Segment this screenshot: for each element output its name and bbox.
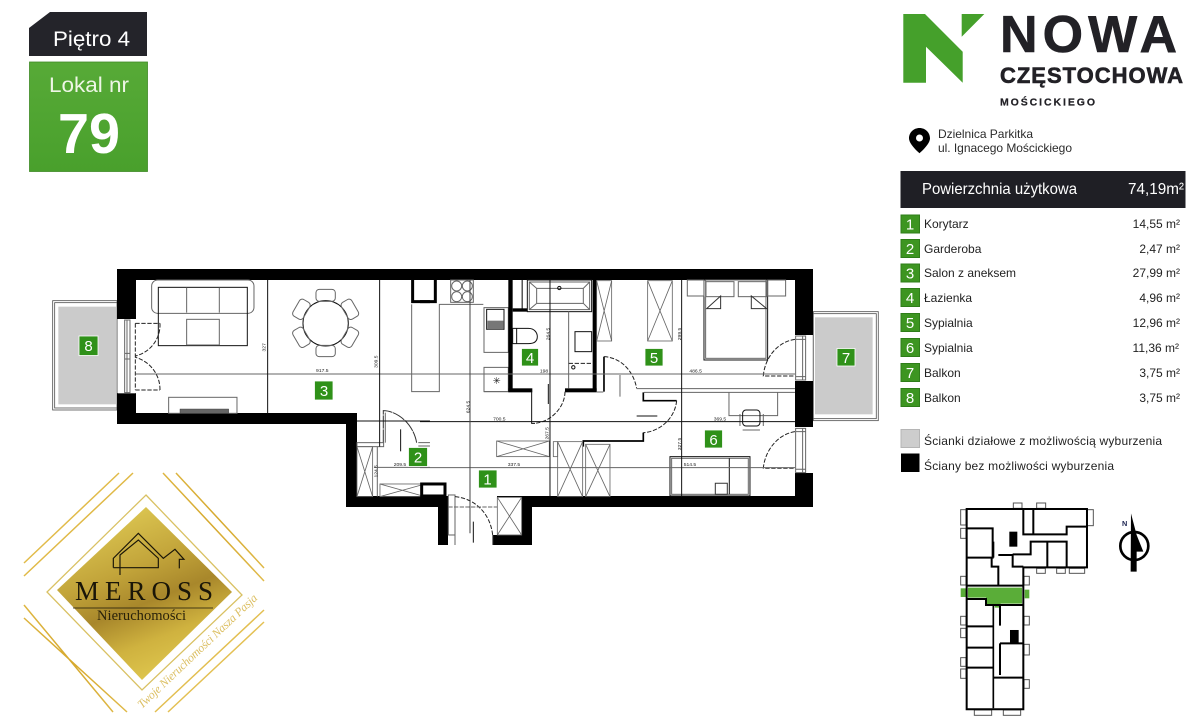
developer logo: Nowa Częstochowa bbox=[903, 6, 1183, 108]
room 4 row bbox=[901, 288, 1180, 307]
room 2 row: Garderoba bbox=[924, 242, 982, 256]
room 5 row: 5 bbox=[906, 315, 914, 332]
marker 5 bbox=[645, 348, 663, 367]
dimension lines: 327 bbox=[262, 343, 268, 351]
marker 2 bbox=[408, 448, 428, 466]
room 1 row: 1 bbox=[906, 216, 914, 234]
dimension lines: 267.5 bbox=[545, 427, 551, 440]
kitchen fittings: ✳ bbox=[493, 376, 501, 386]
Meross Nieruchomości logo: Twoje Nieruchomości Nasza Pasja bbox=[134, 591, 260, 711]
room 1 row: 14,55 m² bbox=[1133, 217, 1180, 231]
marker 4: 4 bbox=[526, 350, 534, 367]
marker 6: 6 bbox=[709, 432, 718, 449]
room 5 row: Sypialnia bbox=[924, 316, 973, 330]
unit number badge bbox=[30, 62, 148, 172]
room 5 row bbox=[901, 314, 1180, 332]
dimension lines: 264.5 bbox=[546, 328, 552, 340]
marker 3 bbox=[314, 381, 333, 400]
Meross Nieruchomości logo: MEROSS bbox=[75, 576, 213, 606]
marker 7: 7 bbox=[842, 350, 850, 367]
marker 7 bbox=[837, 348, 855, 367]
room 1 row bbox=[901, 215, 1180, 234]
room 8 row: Balkon bbox=[924, 391, 961, 405]
dimension lines: 369.5 bbox=[714, 416, 726, 422]
balconies on key plan bbox=[961, 503, 1093, 715]
marker 1: 1 bbox=[483, 472, 492, 488]
balcony 7 bbox=[813, 312, 878, 421]
room 2 row: 2 bbox=[906, 241, 914, 258]
dimension lines bbox=[136, 280, 795, 533]
Meross Nieruchomości logo: Nieruchomości bbox=[97, 608, 186, 624]
corridor partitions and doors bbox=[583, 357, 795, 447]
marker 8: 8 bbox=[84, 338, 93, 355]
marker 6 bbox=[704, 430, 722, 449]
developer logo: Nowa Częstochowa: NOWA bbox=[1000, 6, 1177, 64]
building outline on key plan bbox=[967, 509, 1087, 709]
dimension lines: 327.5 bbox=[677, 438, 683, 450]
room 2 row bbox=[901, 240, 1180, 258]
floor tag: Piętro 4: Piętro 4 bbox=[53, 28, 130, 51]
bedroom 6 desk, chair and bed bbox=[670, 392, 778, 496]
marker 4 bbox=[522, 348, 538, 367]
gold stripes bbox=[24, 473, 264, 712]
floor tag: Piętro 4 bbox=[29, 12, 147, 56]
usable area header bar: Powierzchnia użytkowa bbox=[922, 181, 1077, 198]
developer logo: Nowa Częstochowa: MOŚCICKIEGO bbox=[1000, 96, 1095, 108]
bedroom 5 wardrobes and bed bbox=[597, 280, 786, 360]
address with location pin bbox=[909, 127, 1072, 155]
room 6 row bbox=[901, 338, 1179, 357]
dimension lines: 299.5 bbox=[677, 328, 683, 340]
room 2 row: 2,47 m² bbox=[1139, 242, 1180, 256]
sofa and coffee table bbox=[152, 280, 254, 346]
room 5 row: 12,96 m² bbox=[1133, 316, 1180, 330]
Meross Nieruchomości logo bbox=[24, 473, 264, 712]
wall legend: Ściany bez możliwości wyburzenia bbox=[924, 458, 1114, 473]
marker 5: 5 bbox=[650, 350, 658, 367]
icon: map pin bbox=[909, 128, 930, 153]
dimension lines: 486.5 bbox=[689, 368, 702, 374]
room 4 row: Łazienka bbox=[924, 291, 972, 305]
dimension lines: 624.5 bbox=[465, 401, 471, 413]
icon: green N bbox=[903, 14, 984, 83]
dimension lines: 514.5 bbox=[684, 462, 696, 468]
dining table with chairs bbox=[291, 289, 360, 357]
interior: kitchen, bathroom, bedrooms bbox=[412, 280, 806, 545]
hallway wardrobes bbox=[497, 441, 610, 497]
room 8 row: 3,75 m² bbox=[1139, 391, 1180, 405]
living room and dining furniture bbox=[118, 280, 430, 497]
diamond frame bbox=[47, 495, 242, 690]
dimension lines: 209.5 bbox=[394, 462, 406, 468]
marker 1 bbox=[478, 470, 497, 488]
marker 2: 2 bbox=[414, 450, 422, 466]
room 6 row: 11,36 m² bbox=[1133, 341, 1179, 355]
room 3 row: Salon z aneksem bbox=[924, 266, 1016, 280]
room 7 row: Balkon bbox=[924, 366, 961, 380]
room 4 row: 4,96 m² bbox=[1139, 291, 1180, 305]
room 3 row: 3 bbox=[906, 266, 914, 282]
room 3 row: 27,99 m² bbox=[1133, 266, 1180, 280]
dimension lines: 124.5 bbox=[374, 465, 380, 478]
address with location pin: Dzielnica Parkitka bbox=[938, 127, 1033, 141]
developer logo: Nowa Częstochowa: CZĘSTOCHOWA bbox=[1000, 63, 1183, 88]
highlighted unit on key plan bbox=[961, 588, 1029, 608]
north arrow compass bbox=[1120, 513, 1148, 572]
room 7 row: 7 bbox=[906, 365, 914, 382]
TV unit bbox=[169, 397, 237, 413]
marker 3: 3 bbox=[320, 383, 328, 400]
kitchen fittings bbox=[412, 280, 532, 392]
entrance door and closet bbox=[422, 484, 522, 545]
bedroom windows and doors bbox=[763, 335, 806, 473]
dimension lines: 337.5 bbox=[508, 462, 520, 468]
room 8 row bbox=[901, 388, 1180, 407]
wall legend bbox=[901, 430, 1162, 473]
balcony 8 bbox=[53, 301, 117, 410]
room 4 row: 4 bbox=[906, 290, 914, 307]
floor plan bbox=[53, 269, 878, 545]
room area list bbox=[901, 215, 1180, 407]
bathroom walls and fittings bbox=[508, 280, 597, 423]
dimension lines: 198 bbox=[540, 368, 548, 374]
dimension lines: 917.5 bbox=[316, 368, 329, 374]
unit number badge: Lokal nr bbox=[49, 73, 129, 97]
usable area header bar bbox=[900, 171, 1186, 208]
wall legend: Ścianki działowe z możliwością wyburzenia bbox=[924, 433, 1162, 448]
dimension lines: 700.5 bbox=[493, 416, 506, 422]
room 7 row bbox=[901, 364, 1180, 382]
building key plan bbox=[961, 503, 1093, 715]
room 7 row: 3,75 m² bbox=[1139, 366, 1180, 380]
usable area header bar: 74,19m² bbox=[1128, 181, 1185, 198]
marker 8 bbox=[79, 336, 98, 356]
wardrobe 2 and door bbox=[357, 411, 430, 497]
room 3 row bbox=[901, 264, 1180, 282]
kitchen block bbox=[413, 280, 430, 302]
room 6 row: Sypialnia bbox=[924, 341, 973, 355]
load-bearing walls bbox=[117, 269, 813, 545]
icon: house outline bbox=[113, 533, 184, 575]
room 6 row: 6 bbox=[906, 340, 914, 357]
room number markers bbox=[79, 336, 855, 488]
north arrow compass: N bbox=[1122, 519, 1127, 528]
dimension lines: 309.5 bbox=[374, 355, 380, 368]
room 8 row: 8 bbox=[906, 390, 914, 407]
gold diamond bbox=[57, 507, 232, 680]
room 1 row: Korytarz bbox=[924, 217, 969, 231]
address with location pin: ul. Ignacego Mościckiego bbox=[938, 141, 1072, 155]
unit number badge: 79 bbox=[58, 102, 120, 166]
balcony door, left bbox=[118, 319, 160, 393]
